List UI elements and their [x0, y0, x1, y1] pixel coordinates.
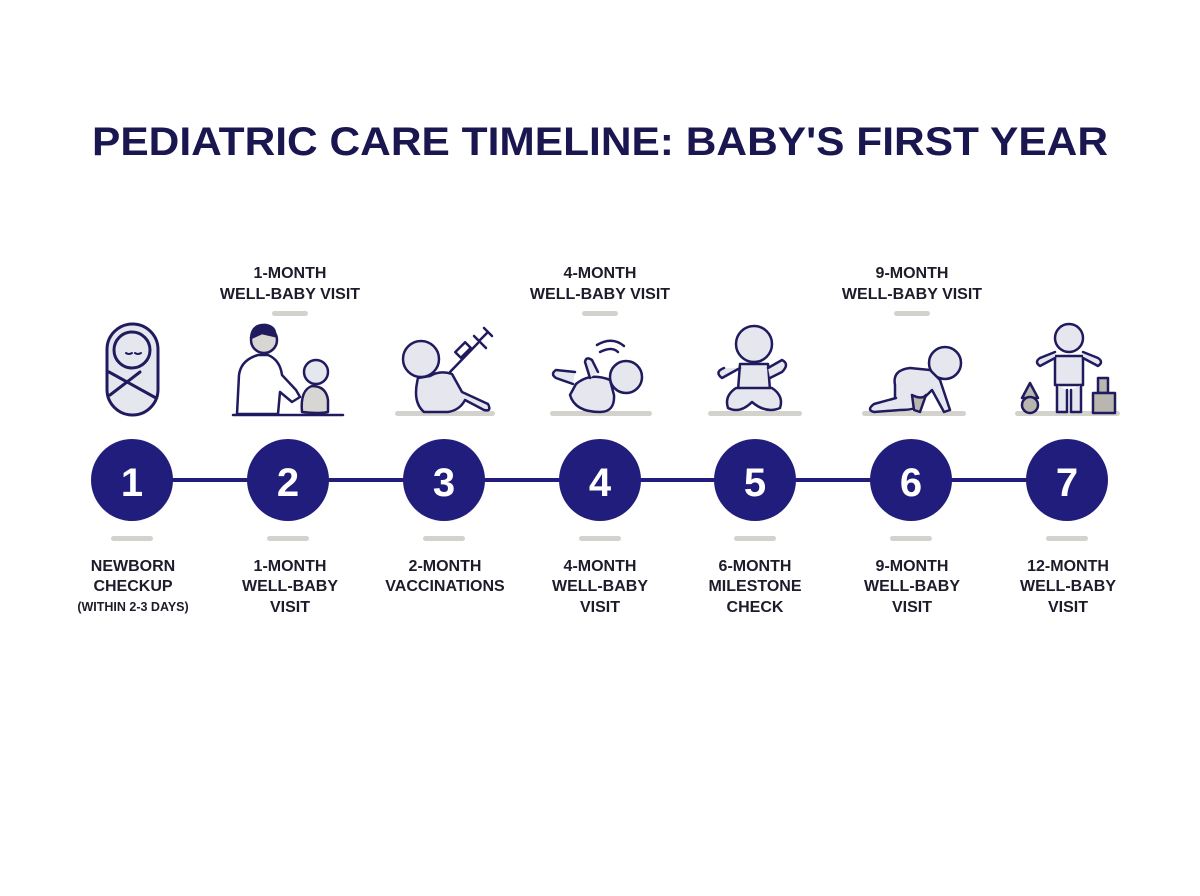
step 2: 2 [277, 461, 299, 505]
bottom label 7: VISIT [1048, 599, 1088, 616]
bottom label 4: VISIT [580, 599, 620, 616]
bottom label 1: (WITHIN 2-3 DAYS) [77, 600, 189, 614]
top label: 9-month: WELL-BABY VISIT [842, 286, 982, 303]
step 4: 4 [589, 461, 612, 505]
bottom label 4 [552, 536, 648, 616]
top label: 4-month: WELL-BABY VISIT [530, 286, 670, 303]
top label: 9-month: 9-MONTH [876, 265, 948, 282]
timeline line [132, 478, 1067, 482]
bottom label 2 [242, 536, 338, 616]
step 6 [870, 439, 952, 521]
icon: crawling baby [862, 347, 966, 416]
icon: standing toddler with toys [1015, 324, 1120, 416]
step 1: 1 [121, 461, 143, 505]
top label: 4-month: 4-MONTH [564, 265, 636, 282]
icon: sitting baby [708, 326, 802, 416]
icon: baby on back [550, 341, 652, 416]
bottom label 1: NEWBORN [91, 558, 175, 575]
top label: 1-month [220, 265, 360, 316]
step 6: 6 [900, 461, 922, 505]
step 7 [1026, 439, 1108, 521]
bottom label 3: VACCINATIONS [385, 578, 505, 595]
icon: doctor with baby [233, 325, 343, 415]
step 1 [91, 439, 173, 521]
bottom label 4: 4-MONTH [564, 558, 636, 575]
bottom label 2: 1-MONTH [254, 558, 326, 575]
step 5: 5 [744, 461, 766, 505]
bottom label 2: VISIT [270, 599, 310, 616]
bottom label 6: WELL-BABY [864, 578, 960, 595]
icon: baby getting vaccination [395, 328, 495, 416]
step 7: 7 [1056, 461, 1078, 505]
bottom label 5: MILESTONE [708, 578, 802, 595]
bottom label 7 [1020, 536, 1116, 616]
bottom label 5: CHECK [727, 599, 784, 616]
bottom label 6: 9-MONTH [876, 558, 948, 575]
bottom label 6: VISIT [892, 599, 932, 616]
title: PEDIATRIC CARE TIMELINE: BABY'S FIRST YEAR [92, 120, 1108, 164]
step 4 [559, 439, 641, 521]
top label: 9-month [842, 265, 982, 316]
step 3 [403, 439, 485, 521]
step 5 [714, 439, 796, 521]
icon: swaddled newborn [107, 324, 158, 415]
bottom label 3: 2-MONTH [409, 558, 481, 575]
bottom label 4: WELL-BABY [552, 578, 648, 595]
step 2 [247, 439, 329, 521]
top label: 1-month: 1-MONTH [254, 265, 326, 282]
bottom label 6 [864, 536, 960, 616]
step 3: 3 [433, 461, 455, 505]
bottom label 7: WELL-BABY [1020, 578, 1116, 595]
bottom label 1: CHECKUP [93, 578, 173, 595]
bottom label 5: 6-MONTH [719, 558, 791, 575]
bottom label 5 [708, 536, 802, 616]
bottom label 2: WELL-BABY [242, 578, 338, 595]
top label: 1-month: WELL-BABY VISIT [220, 286, 360, 303]
bottom label 7: 12-MONTH [1027, 558, 1109, 575]
bottom label 1 [77, 536, 189, 614]
top label: 4-month [530, 265, 670, 316]
bottom label 3 [385, 536, 505, 595]
